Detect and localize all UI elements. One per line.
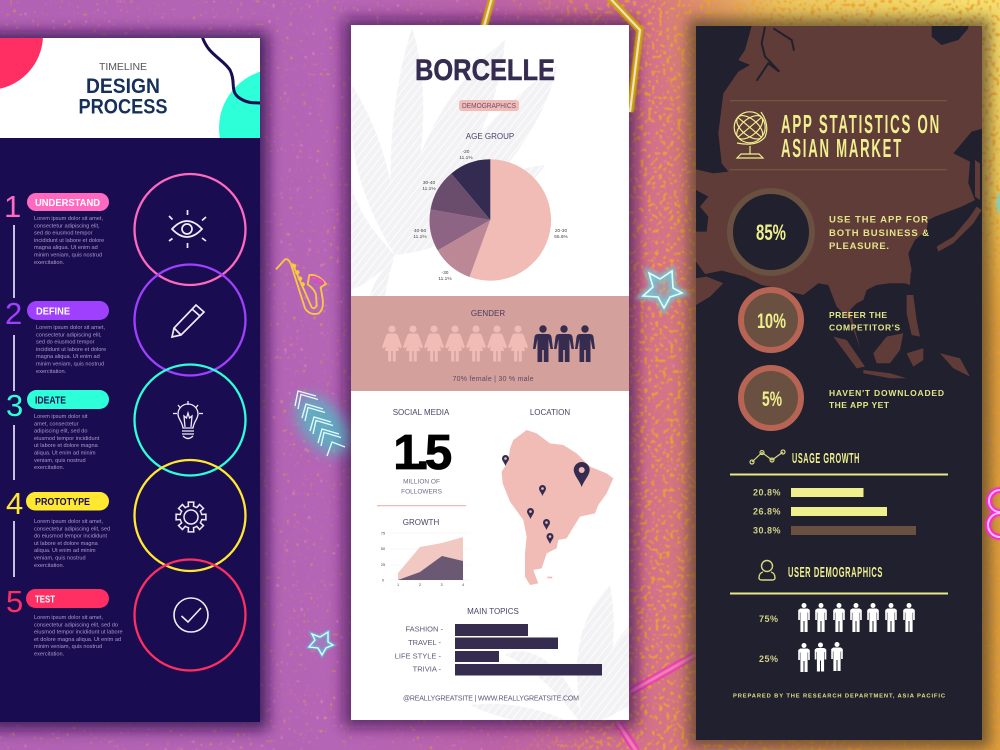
- pie chart: age group: [413, 149, 569, 282]
- band: gender: GENDER: [471, 309, 505, 318]
- label pill: demographics: DEMOGRAPHICS: [462, 103, 516, 110]
- heading: user demographics: USER DEMOGRAPHICS: [788, 564, 883, 581]
- pictograms: 25%: [759, 642, 843, 672]
- step 3: ideate: adipiscing elit, sed do: [34, 429, 88, 435]
- step 2: define: minim veniam, quis nostrud: [36, 362, 104, 368]
- icon: pencil: [172, 305, 204, 337]
- pie chart: age group: -20: [463, 149, 470, 155]
- step 3: ideate: ut labore et dolore magna: [34, 443, 99, 449]
- step 2: define: incididunt ut labore et dolore: [36, 347, 106, 353]
- logo: BORCELLE: [415, 54, 555, 87]
- subtitle: TIMELINE: [99, 61, 147, 73]
- step 1: understand: magna aliqua. Ut enim ad: [34, 245, 98, 251]
- step 3: ideate: Lorem ipsum dolor sit: [34, 414, 88, 420]
- stat: 10%: [741, 290, 900, 350]
- chart: growth area: 75: [381, 532, 385, 536]
- step 2: define: exercitation.: [36, 369, 67, 375]
- icon: person: [759, 560, 775, 580]
- step 1: understand: Lorem ipsum dolor sit amet,: [34, 216, 103, 222]
- band: gender: 70% female | 30 % male: [452, 376, 534, 383]
- chart: growth area: [381, 518, 470, 587]
- social media block: FOLLOWERS: [401, 488, 443, 496]
- pie chart: age group: -30: [442, 270, 449, 276]
- step 5: test: Lorem ipsum dolor sit amet,: [34, 615, 103, 621]
- social media block: SOCIAL MEDIA: [393, 408, 450, 417]
- title: DESIGN: [86, 74, 160, 98]
- stat: 85%: USE THE APP FOR: [829, 214, 928, 226]
- chart: growth area: 4: [462, 583, 464, 587]
- step 3: ideate: [6, 388, 109, 480]
- step 4: prototype: ut labore et dolore magna: [34, 541, 99, 547]
- social media block: 1.5: [393, 426, 451, 480]
- step 3: ideate: amet, consectetur: [34, 421, 79, 427]
- chart: growth area: 0: [382, 578, 384, 582]
- icon: light bulb: [173, 401, 203, 438]
- bar chart: main topics: LIFE STYLE -: [395, 652, 442, 660]
- footer: website: @REALLYGREATSITE | WWW.REALLYGREATSITE.COM: [403, 696, 579, 702]
- map: location: LOCATION: [530, 408, 570, 417]
- pictograms: 75%: [759, 603, 915, 632]
- step 4: prototype: consectetur adipiscing elit, sed: [34, 526, 110, 532]
- neon hexagon: [483, 0, 640, 112]
- step 3: ideate: veniam, quis nostrud: [34, 458, 86, 464]
- step 3: ideate: 3: [6, 388, 23, 423]
- step 4: prototype: [6, 486, 110, 577]
- step 1: understand: minim veniam, quis nostrud: [34, 252, 102, 258]
- step 3: ideate: IDEATE: [35, 396, 66, 406]
- chart: growth area: 3: [440, 583, 443, 587]
- stat: 85%: 85%: [756, 220, 786, 245]
- step 2: define: [5, 296, 109, 391]
- map: location: [502, 408, 613, 585]
- panel: borcelle demographics: [350, 25, 640, 730]
- pie chart: age group: 11.1%: [459, 155, 473, 161]
- bar chart: main topics: FASHION -: [405, 624, 443, 634]
- stat: 85%: BOTH BUSINESS &: [829, 228, 929, 239]
- panel: app statistics: [696, 26, 983, 740]
- map: asia: [696, 26, 983, 378]
- icon: saxophone: [276, 259, 326, 314]
- pie chart: age group: 11.1%: [422, 186, 436, 192]
- step 5: test: eiusmod tempor incididunt ut labore: [34, 630, 123, 636]
- icon: neon star lower: [309, 632, 333, 655]
- step 5: test: exercitation.: [34, 652, 65, 658]
- band: gender: [351, 296, 629, 391]
- stat: 5%: THE APP YET: [829, 400, 890, 410]
- title: PROCESS: [78, 94, 168, 118]
- step 5: test: [6, 584, 123, 658]
- bar chart: main topics: MAIN TOPICS: [467, 607, 519, 616]
- heading: usage growth: USAGE GROWTH: [792, 450, 860, 467]
- stat: 85%: PLEASURE.: [829, 241, 889, 252]
- step 1: understand: sed do eiusmod tempor: [34, 231, 93, 237]
- ring circles: [134, 174, 246, 670]
- pie chart: age group: 20-30: [555, 228, 567, 234]
- title rules: [730, 100, 947, 170]
- bar chart: usage growth: 26.8%: [753, 506, 781, 516]
- step 4: prototype: Lorem ipsum dolor sit amet,: [34, 519, 103, 525]
- social media block: [393, 408, 451, 496]
- chart: growth area: GROWTH: [403, 518, 439, 527]
- step 5: test: TEST: [35, 594, 55, 606]
- header shapes: [0, 38, 260, 138]
- icon: gear: [176, 502, 206, 532]
- step 5: test: 5: [6, 584, 23, 619]
- bar chart: main topics: TRAVEL -: [408, 638, 441, 647]
- map pins: [502, 455, 590, 544]
- neon shape right edge: [988, 490, 1000, 537]
- chart: growth area: 1: [397, 583, 399, 587]
- step 4: prototype: aliqua. Ut enim ad minim: [34, 548, 96, 554]
- step 1: understand: incididunt ut labore et dolore: [34, 238, 104, 244]
- stat: 5%: 5%: [762, 388, 782, 411]
- step 2: define: 2: [5, 296, 22, 331]
- chart: growth area: 2: [419, 583, 421, 587]
- icon: eye: [169, 210, 206, 248]
- step 3: ideate: eiusmod tempor incididunt: [34, 436, 100, 442]
- step 3: ideate: exercitation.: [34, 465, 65, 471]
- stat: 85%: [730, 191, 929, 273]
- step 4: prototype: exercitation.: [34, 563, 65, 569]
- step 5: test: et dolore magna aliqua. Ut enim ad: [34, 637, 121, 643]
- step 2: define: Lorem ipsum dolor sit amet,: [36, 325, 105, 331]
- heading: age group: AGE GROUP: [466, 132, 514, 141]
- panel: design process timeline: [0, 0, 337, 722]
- pie chart: age group: 11.1%: [413, 234, 427, 240]
- neon line bottom: [618, 723, 637, 750]
- chart: growth area: 50: [381, 547, 385, 551]
- palm watermark: [350, 28, 640, 730]
- stat: 10%: COMPETITOR'S: [829, 322, 900, 332]
- pie chart: age group: 40-50: [414, 228, 426, 234]
- stat: 5%: HAVEN'T DOWNLOADED: [829, 388, 944, 398]
- step 1: understand: UNDERSTAND: [35, 198, 100, 209]
- step 3: ideate: aliqua. Ut enim ad minim: [34, 450, 96, 456]
- step 2: define: DEFINE: [36, 306, 70, 318]
- step 2: define: magna aliqua. Ut enim ad: [36, 354, 100, 360]
- icon: line chart: [750, 450, 785, 464]
- female pictograms: [382, 326, 528, 362]
- male pictograms: [533, 325, 595, 362]
- pie chart: age group: 55.6%: [554, 234, 569, 240]
- step 1: understand: consectetur adipiscing elit,: [34, 223, 100, 229]
- divider: [377, 505, 466, 506]
- icon: neon chevrons: [285, 386, 359, 464]
- stat: 10%: 10%: [757, 310, 786, 333]
- step 1: understand: exercitation.: [34, 260, 65, 266]
- bar chart: main topics: [395, 607, 602, 676]
- bar chart: usage growth: [753, 488, 916, 536]
- step 1: understand: 1: [4, 189, 21, 224]
- teal glow right edge: [996, 192, 1000, 214]
- pie chart: age group: 11.1%: [438, 276, 452, 282]
- label pill: demographics: [459, 100, 519, 111]
- step 2: define: consectetur adipiscing elit,: [36, 332, 102, 338]
- step 5: test: consectetur adipiscing elit, sed do: [34, 622, 118, 628]
- step 4: prototype: do eiusmod tempor incididunt: [34, 534, 108, 540]
- social media block: MILLION OF: [403, 478, 440, 486]
- icon: globe: [733, 111, 767, 158]
- icon: neon star right: [643, 271, 682, 308]
- stat: 5%: [741, 368, 944, 428]
- title: [781, 109, 941, 163]
- step 4: prototype: 4: [6, 486, 23, 521]
- step 5: test: minim veniam, quis nostrud: [34, 644, 102, 650]
- icon: check: [174, 598, 208, 632]
- pictograms: 75%: 75%: [759, 614, 779, 624]
- stat: 10%: PREFER THE: [829, 310, 887, 320]
- chart: growth area: 25: [381, 563, 385, 567]
- neon line lower right: [630, 655, 695, 692]
- step 2: define: sed do eiusmod tempor: [36, 340, 95, 346]
- title: [78, 74, 168, 118]
- bar chart: usage growth: 30.8%: [753, 526, 781, 536]
- step 4: prototype: veniam, quis nostrud: [34, 556, 86, 562]
- step 4: prototype: PROTOTYPE: [35, 497, 90, 508]
- bar chart: usage growth: 20.8%: [753, 488, 781, 498]
- pictograms: 25%: 25%: [759, 654, 779, 664]
- pie chart: age group: 30-40: [423, 180, 435, 186]
- step 1: understand: [4, 189, 109, 298]
- footer note: PREPARED BY THE RESEARCH DEPARTMENT, ASIA PACIFIC: [733, 694, 946, 700]
- bar chart: main topics: TRIVIA -: [413, 664, 441, 674]
